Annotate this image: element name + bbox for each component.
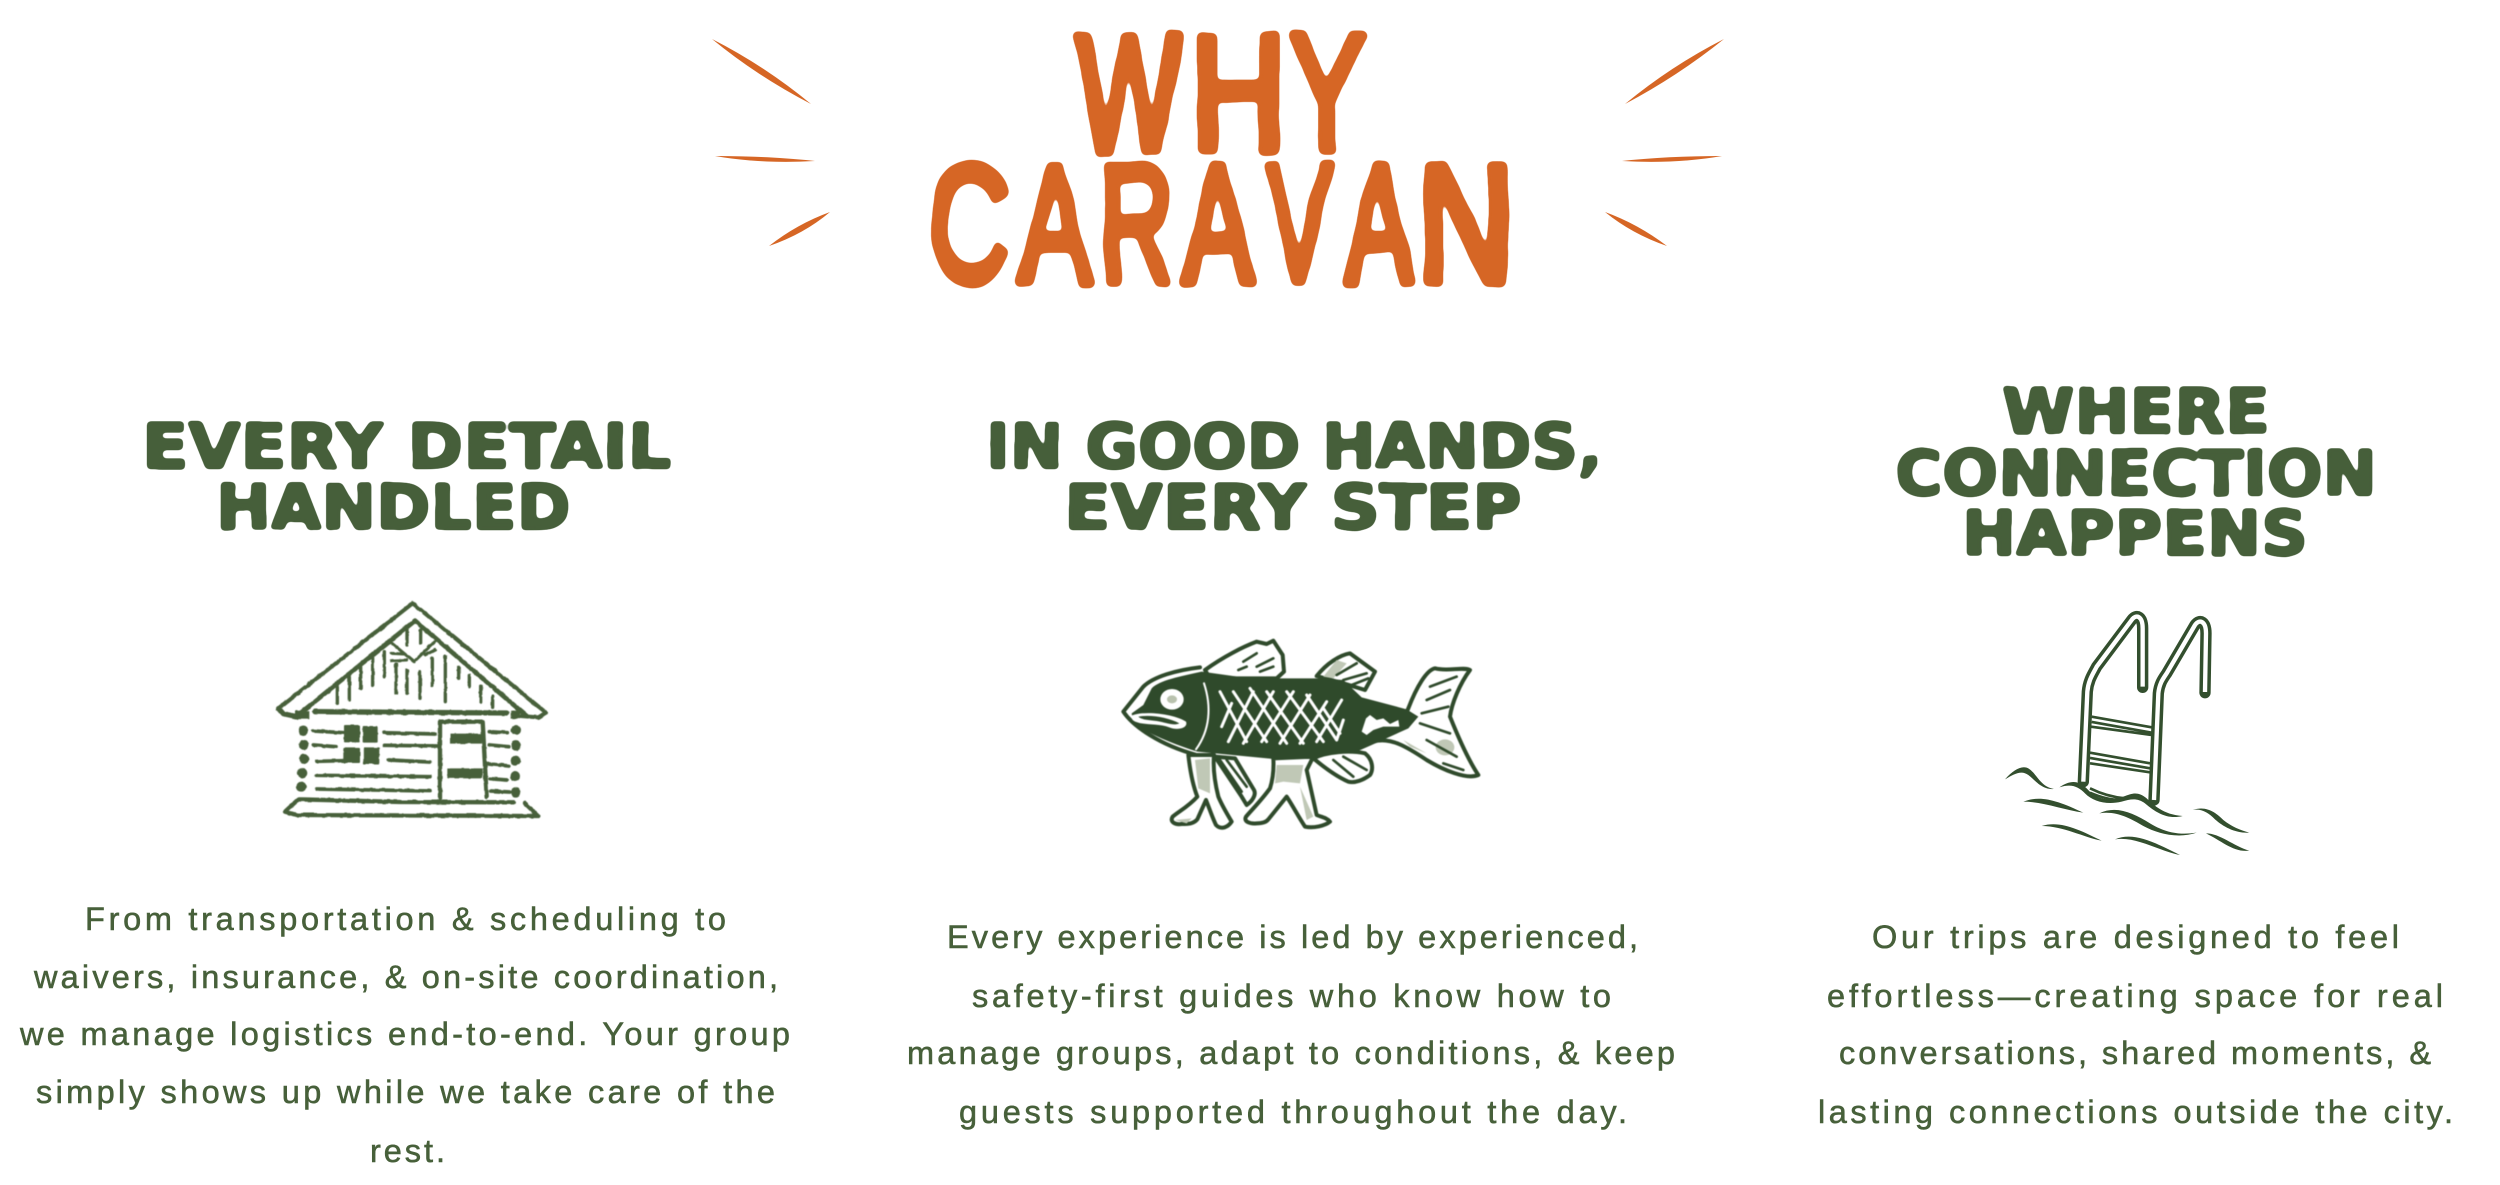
sunburst accent marks around the title [712, 39, 1724, 246]
icon: log cabin [278, 603, 546, 816]
icon: pool ladder in water [2005, 617, 2249, 855]
title: Why Caravan: H [1190, 0, 1286, 185]
panel: where connection happens [1818, 375, 2453, 1130]
heading: in good hands, every step [986, 410, 1602, 544]
text block: logistics description: simply shows up while we take care of the [36, 1074, 775, 1110]
title: Why Caravan: R [1099, 129, 1173, 318]
title: Why Caravan [928, 0, 1514, 319]
title: Why Caravan: A [1183, 129, 1253, 318]
heading: every detail handled: EVERY DETAIL [142, 410, 671, 483]
heading: where connection happens: HAPPENS [1962, 497, 2308, 570]
panel: every detail handled [19, 410, 790, 1169]
text block: connection description: Our trips are designed to feel [1872, 919, 2399, 955]
text block: guides description [907, 919, 1675, 1130]
heading: in good hands, every step: IN GOOD HANDS, [986, 410, 1602, 483]
text block: logistics description: From transportation & scheduling to [85, 901, 726, 937]
title: Why Caravan: N [1418, 130, 1514, 319]
panel: in good hands, every step [907, 410, 1675, 1130]
heading: where connection happens: CONNECTION [1895, 437, 2377, 510]
heading: every detail handled [142, 410, 671, 544]
text block: guides description: Every experience is led by experienced, [947, 919, 1638, 955]
text block: connection description [1818, 919, 2453, 1130]
title: Why Caravan: W [1075, 1, 1183, 186]
heading: where connection happens [1895, 375, 2377, 570]
text block: guides description: guests supported throughout the day. [959, 1094, 1627, 1130]
title: Why Caravan: Y [1289, 0, 1365, 186]
text block: connection description: effortless—creating space for real [1827, 978, 2443, 1014]
text block: connection description: lasting connections outside the city. [1818, 1094, 2453, 1130]
text block: logistics description: we manage logistics end-to-end. Your group [19, 1016, 790, 1052]
title: Why Caravan: C [928, 130, 1010, 318]
title: Why Caravan: A [1344, 129, 1414, 318]
text block: guides description: safety-first guides who know how to [972, 978, 1611, 1014]
icon: walking fish [1123, 641, 1478, 828]
text block: logistics description: waivers, insurance, & on-site coordination, [33, 959, 778, 995]
text block: connection description: conversations, shared moments, & [1839, 1035, 2431, 1071]
heading: where connection happens: WHERE [2002, 375, 2270, 448]
title: Why Caravan: V [1267, 130, 1331, 319]
heading: every detail handled: HANDLED [216, 471, 571, 544]
text block: logistics description: rest. [370, 1133, 445, 1169]
text block: logistics description [19, 901, 790, 1169]
heading: in good hands, every step: EVERY STEP [1064, 471, 1522, 544]
title: Why Caravan: A [1020, 129, 1090, 318]
text block: guides description: manage groups, adapt to conditions, & keep [907, 1035, 1675, 1071]
